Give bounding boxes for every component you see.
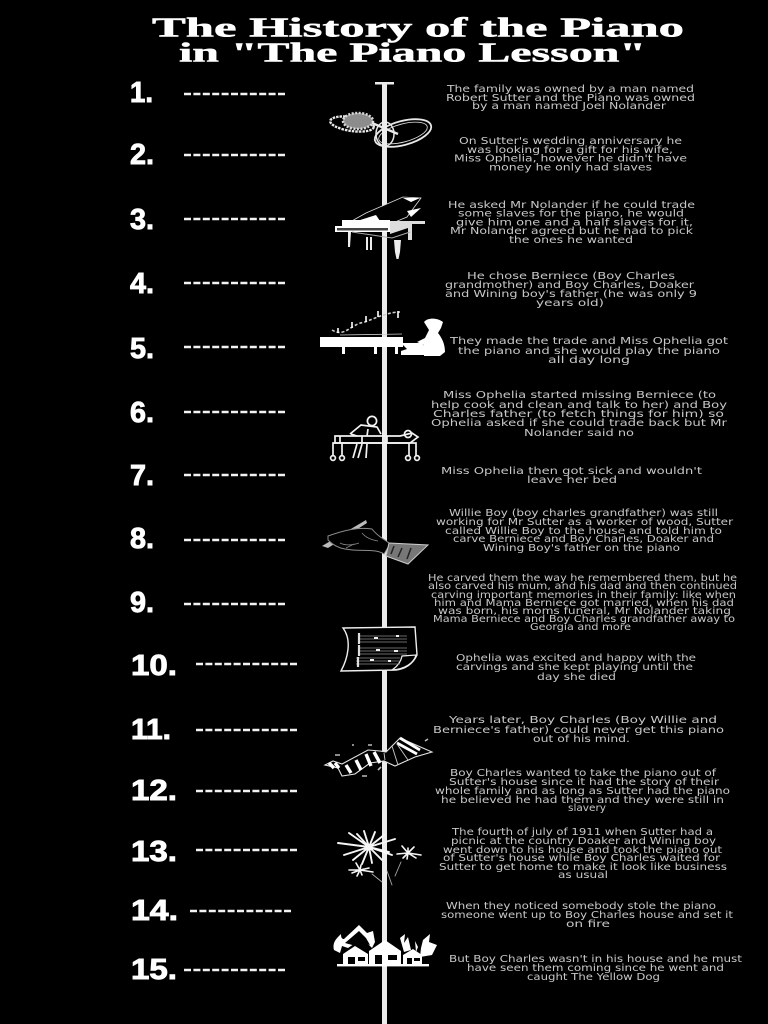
text block 8: Willie Boy (boy charles grandfather) was still [449, 508, 718, 519]
timeline numbers: 1. [130, 77, 153, 109]
text block 10: day she died [537, 672, 616, 683]
timeline numbers: 7. [130, 460, 154, 492]
text block 5: They made the trade and Miss Ophelia got [449, 336, 728, 347]
text block 1: Robert Sutter and the Piano was owned [446, 93, 695, 104]
text block 8: working for Mr Sutter as a worker of wood, Sutter [436, 517, 734, 528]
text block 14 [441, 901, 733, 930]
text block 4: grandmother) and Boy Charles, Doaker [445, 280, 695, 291]
text block 9 [428, 573, 737, 633]
text block 11: Years later, Boy Charles (Boy Willie and [448, 715, 717, 726]
text block 9: Georgia and more [530, 622, 631, 633]
text block 12: Boy Charles wanted to take the piano out of [450, 768, 717, 779]
text block 2: money he only had slaves [489, 162, 652, 174]
title: in "The Piano Lesson" [179, 38, 646, 68]
text block 11: out of his mind. [533, 734, 630, 745]
text block 12: Sutter's house since it had the story of their [449, 777, 720, 788]
text block 14: When they noticed somebody stole the piano [446, 901, 716, 912]
text block 3: He asked Mr Nolander if he could trade [448, 200, 695, 211]
text block 3: give him one and a half slaves for it, [456, 218, 693, 228]
text block 9: also carved his mum, and his dad and then continued [428, 581, 737, 592]
timeline numbers: 11. [131, 714, 171, 746]
timeline axis [375, 82, 394, 1024]
text block 13: picnic at the country Doaker and Wining boy [451, 836, 716, 847]
text block 12: slavery [568, 803, 606, 814]
text block 13: as usual [558, 870, 608, 881]
text block 12 [435, 768, 730, 814]
timeline numbers: 8. [130, 523, 154, 555]
icon: figure beside a bed [331, 416, 419, 460]
timeline numbers: 13. [131, 836, 177, 868]
text block 7 [441, 466, 702, 486]
icon: sheet music [341, 627, 417, 671]
text block 13: The fourth of july of 1911 when Sutter had a [451, 827, 713, 838]
icon: grand piano [335, 197, 425, 259]
text block 13: of Sutter's house while Boy Charles waited for [443, 853, 721, 864]
timeline numbers: 14. [131, 895, 178, 927]
text block 6: Charles father (to fetch things for him) so [433, 409, 724, 420]
text block 1 [446, 84, 695, 112]
text block 8: called Willie Boy to the house and told him to [445, 526, 722, 537]
text block 15: have seen them coming since he went and [467, 963, 724, 974]
text block 9: carving important memories in their family: like when [431, 590, 736, 601]
text block 4: He chose Berniece (Boy Charles [467, 271, 675, 282]
text block 12: he believed he had them and they were still in [441, 795, 724, 806]
text block 9: was born, his moms funeral, Mr Nolander taking [438, 606, 731, 617]
timeline numbers: 12. [131, 775, 177, 807]
timeline numbers: 5. [130, 333, 154, 365]
text block 4: and Wining boy's father (he was only 9 [445, 289, 697, 300]
text block 9: He carved them the way he remembered them, but he [428, 573, 737, 584]
text block 13: Sutter to get home to make it look like business [439, 862, 727, 873]
text block 7: leave her bed [527, 475, 617, 486]
text block 11 [433, 715, 724, 745]
dashed connector lines [184, 94, 298, 970]
text block 6 [431, 390, 728, 439]
text block 5: all day long [548, 355, 630, 366]
title [152, 12, 684, 68]
text block 2: Miss Ophelia, however he didn't have [454, 154, 687, 164]
text block 10: Ophelia was excited and happy with the [456, 653, 696, 664]
text block 3: some slaves for the piano, he would [458, 208, 684, 220]
text block 2 [454, 136, 687, 174]
text block 3 [448, 200, 695, 246]
text block 10: carvings and she kept playing until the [456, 662, 693, 673]
text block 7: Miss Ophelia then got sick and wouldn't [441, 466, 702, 477]
timeline numbers: 6. [130, 397, 154, 429]
icon: burning houses [334, 925, 437, 966]
text block 10 [456, 653, 696, 683]
text block 6: Miss Ophelia started missing Berniece (to [443, 390, 716, 401]
text block 15: caught The Yellow Dog [527, 972, 660, 983]
text block 12: whole family and as long as Sutter had the piano [435, 786, 730, 797]
timeline numbers: 15. [131, 954, 177, 986]
text block 4: years old) [536, 298, 604, 309]
text block 5: the piano and she would play the piano [458, 346, 720, 357]
icon: hand writing with a pen [322, 520, 428, 564]
text block 1: by a man named Joel Nolander [472, 101, 667, 112]
text block 8 [436, 508, 734, 554]
timeline numbers: 10. [131, 650, 177, 682]
text block 5 [449, 336, 728, 366]
timeline numbers: 2. [130, 139, 154, 171]
icon: fireworks [338, 831, 421, 885]
text block 1: The family was owned by a man named [446, 84, 694, 95]
text block 15: But Boy Charles wasn't in his house and he must [449, 954, 742, 965]
text block 13: went down to his house and took the piano out [443, 845, 722, 856]
timeline numbers: 4. [130, 268, 154, 300]
timeline numbers [130, 77, 178, 986]
text block 14: on fire [566, 919, 610, 930]
text block 6: Nolander said no [524, 428, 634, 439]
text block 11: Berniece's father) could never get this piano [433, 725, 724, 736]
text block 3: the ones he wanted [509, 235, 633, 246]
text block 14: someone went up to Boy Charles house and set it [441, 910, 733, 921]
text block 6: Ophelia asked if she could trade back but Mr [431, 418, 728, 429]
text block 9: Mama Berniece and Boy Charles grandfather away to [433, 614, 735, 625]
icon: wavy piano keyboard [325, 738, 432, 776]
text block 13 [439, 827, 727, 881]
text block 2: was looking for a gift for his wife, [467, 145, 673, 156]
text block 2: On Sutter's wedding anniversary he [459, 136, 682, 147]
timeline numbers: 3. [130, 204, 154, 236]
text block 8: Wining Boy's father on the piano [483, 543, 680, 554]
icon: wedding rings [329, 113, 434, 152]
text block 8: carve Berniece and Boy Charles, Doaker and [453, 534, 714, 545]
icon: pianist at piano [320, 311, 445, 356]
text block 15 [449, 954, 742, 983]
text block 3: Mr Nolander agreed but he had to pick [450, 226, 693, 237]
text block 4 [445, 271, 697, 309]
text block 6: help cook and clean and talk to her) and Boy [431, 400, 727, 411]
title: The History of the Piano [152, 12, 684, 42]
text block 9: him and Mama Berniece got married, when his dad [434, 598, 734, 609]
timeline numbers: 9. [130, 587, 154, 619]
